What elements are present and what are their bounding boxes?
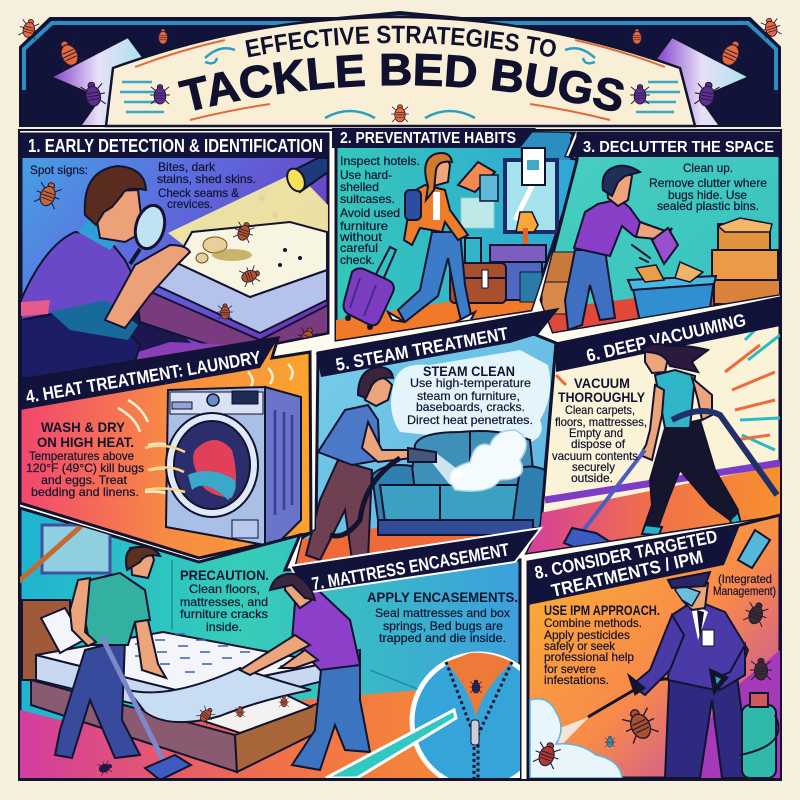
panel 4 text: 120°F (49°C) kill bugs <box>26 461 144 475</box>
panel 5 text: Direct heat penetrates. <box>407 413 533 427</box>
woman head over heading <box>640 344 708 373</box>
man with magnifier <box>21 166 190 378</box>
panel 2 text: furniture <box>340 219 388 233</box>
panel 5 text: steam on furniture, <box>417 389 520 403</box>
panel 5 text: STEAM CLEAN <box>423 363 515 379</box>
title line 2: TACKLE BED BUGS <box>178 54 624 112</box>
panel 1 text: Bites, dark <box>158 160 216 174</box>
panel 3 heading <box>568 133 780 157</box>
panel 2 text: Avoid used <box>340 206 400 220</box>
title line 1: EFFECTIVE STRATEGIES TO <box>245 26 556 58</box>
panel 6 text: securely <box>572 460 615 474</box>
panel 1 heading: 1. EARLY DETECTION & IDENTIFICATION <box>28 136 323 156</box>
man <box>306 367 412 560</box>
panel 8 text: USE IPM APPROACH. <box>544 602 660 618</box>
panel 5 text <box>407 363 533 427</box>
panel 6 heading: 6. DEEP VACUUMING <box>584 310 748 366</box>
boxes left <box>542 252 578 314</box>
panel 3 text <box>649 161 767 213</box>
panel 1 text: crevices. <box>167 197 213 211</box>
panel: 1 early detection <box>21 134 328 378</box>
steam cloud <box>391 350 550 445</box>
frame gaps <box>19 130 781 780</box>
bugs <box>532 599 772 769</box>
steam puff <box>450 430 526 491</box>
picture <box>461 198 494 228</box>
vacuum <box>564 411 777 553</box>
panel 3 heading: 3. DECLUTTER THE SPACE <box>583 139 774 156</box>
woman body <box>640 370 742 535</box>
icon: corner bugs <box>18 16 782 70</box>
lamp and dresser <box>490 212 546 302</box>
spray bottle <box>738 530 770 568</box>
panel 2 text: shelled <box>340 180 379 194</box>
panel 6 text: vacuum contents <box>552 449 638 463</box>
panel 7 right text: Seal mattresses and box <box>375 606 510 620</box>
technician <box>632 572 750 778</box>
panel 4 text: bedding and linens. <box>31 485 139 499</box>
title banner <box>18 11 782 128</box>
panel 4 heading: 4. HEAT TREATMENT: LAUNDRY <box>24 347 262 407</box>
panel 3 text: sealed plastic bins. <box>657 199 759 213</box>
sofa <box>372 431 558 535</box>
panel 8 text: safely or seek <box>544 639 616 653</box>
panel 8 heading: 8. CONSIDER TARGETED <box>533 526 719 583</box>
panel 4 text: Temperatures above <box>29 449 134 463</box>
cream scroll <box>106 17 695 126</box>
panel 8 text <box>544 602 660 687</box>
panel 4 text <box>26 419 144 499</box>
panel: 7 mattress encasement <box>17 508 546 788</box>
panel 2 text: Inspect hotels. <box>340 154 420 168</box>
spray tank <box>740 693 778 778</box>
mirror <box>505 160 557 232</box>
panel: 6 deep vacuuming <box>520 298 780 560</box>
panel 2 heading: 2. PREVENTATIVE HABITS <box>340 130 516 147</box>
panel 1 text: Check seams & <box>158 186 239 200</box>
panel 7 left text: PRECAUTION. <box>180 567 269 583</box>
panel 7 right text: trapped and die inside. <box>379 631 506 645</box>
panel: 8 targeted treatments IPM <box>528 515 780 778</box>
panel 6 text <box>552 375 647 485</box>
panel 7 left text: furniture cracks <box>180 607 268 621</box>
panel 8 heading: TREATMENTS / IPM <box>549 547 705 601</box>
panel 6 text: Empty and <box>569 426 623 440</box>
man with vacuum <box>55 547 191 780</box>
panel: 3 declutter <box>540 133 780 335</box>
panel 7 left text <box>180 567 269 634</box>
panel: 4 heat treatment laundry <box>20 338 311 558</box>
panel 4 text: WASH & DRY <box>41 419 126 435</box>
panel 7 left text: inside. <box>206 620 242 634</box>
flashlight <box>284 158 328 194</box>
purple folder <box>652 228 678 264</box>
panel 4 text: and eggs. Treat <box>41 473 128 487</box>
panel: 2 preventative habits <box>332 128 581 340</box>
cloud spray <box>530 679 680 778</box>
bin <box>628 262 716 322</box>
panel 7 left text: mattresses, and <box>180 595 268 609</box>
panel 6 text: THOROUGHLY <box>558 389 646 405</box>
panel 7 left text: Clean floors, <box>189 582 260 596</box>
bursts <box>555 330 780 452</box>
panel 5 text: baseboards, cracks. <box>416 400 525 414</box>
panel 6 heading <box>556 298 780 372</box>
panel 8 heading <box>528 525 740 605</box>
panel 6 text: VACUUM <box>574 375 630 391</box>
heat waves <box>118 364 293 496</box>
man encasing mattress <box>240 590 370 770</box>
panel 8 text: Apply pesticides <box>544 628 630 642</box>
panel 1 text <box>30 160 256 211</box>
bed <box>22 600 342 776</box>
luggage tags <box>458 148 545 201</box>
panel 2 text <box>339 154 420 267</box>
IPM note: Management) <box>713 584 776 598</box>
ribbon right <box>655 37 749 126</box>
man <box>565 166 672 330</box>
floor <box>527 466 780 553</box>
wall picture <box>17 520 110 583</box>
panel 1 text: stains, shed skins. <box>157 172 256 186</box>
panel 5 heading: 5. STEAM TREATMENT <box>334 323 510 375</box>
man head over heading <box>270 574 315 608</box>
panel 5 text: Use high-temperature <box>410 376 531 390</box>
panel 8 text: for severe <box>544 662 596 676</box>
panel 2 text: Use hard- <box>340 168 392 182</box>
panel 3 text: Clean up. <box>683 161 733 175</box>
floor <box>20 690 520 778</box>
boxes right <box>712 218 780 304</box>
panel 8 text: infestations. <box>544 673 609 687</box>
panel 1 text: Spot signs: <box>30 163 88 177</box>
woman <box>388 153 475 325</box>
panel 3 text: Remove clutter where <box>649 176 767 190</box>
panel 8 text: Combine methods. <box>544 616 642 630</box>
brown suitcase <box>450 238 506 303</box>
panel 2 text: careful <box>340 241 378 255</box>
panel 6 text: floors, mattresses, <box>555 415 647 429</box>
panel: 5 steam treatment <box>296 310 560 566</box>
panel 8 text: professional help <box>544 650 634 664</box>
panel 6 text: Clean carpets, <box>565 403 635 417</box>
arrow to zipper <box>326 710 456 778</box>
IPM note: (Integrated <box>718 572 772 586</box>
panel 2 text: suitcases. <box>340 192 395 206</box>
panel 7 heading: 7. MATTRESS ENCASEMENT <box>310 540 511 594</box>
ribbon left <box>51 37 145 126</box>
panel 2 text: without <box>339 230 383 244</box>
zipper circle <box>410 652 520 778</box>
panel 5 heading <box>316 310 556 377</box>
panel 6 text: dispose of <box>571 437 626 451</box>
nozzle and hose <box>330 448 436 536</box>
panel 6 text: outside. <box>571 471 613 485</box>
IPM note <box>713 572 776 598</box>
panel 4 text: ON HIGH HEAT. <box>37 434 134 450</box>
panel 7 right text: APPLY ENCASEMENTS. <box>367 589 518 605</box>
washing machine <box>166 387 301 545</box>
panel 2 text: check. <box>340 253 375 267</box>
purple suitcase <box>344 247 396 330</box>
panel 3 text: bugs hide. Use <box>668 188 747 202</box>
panel 7 right text: springs, Bed bugs are <box>383 619 503 633</box>
panel 7 right text <box>367 589 518 645</box>
